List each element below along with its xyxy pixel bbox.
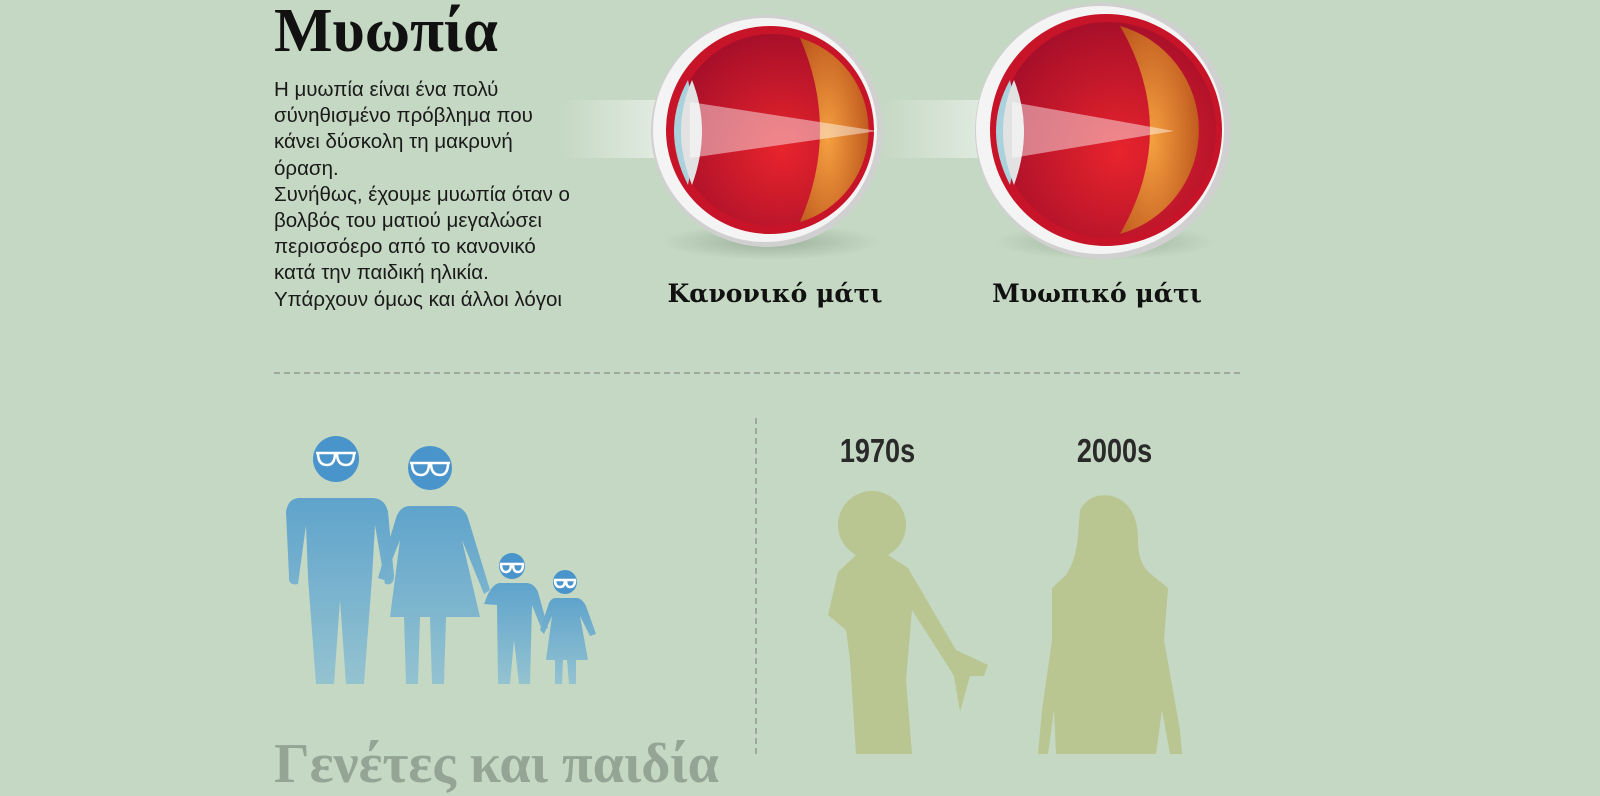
1970s label: 1970s: [840, 432, 915, 469]
bottom partial heading: Γενέτες και παιδία: [274, 733, 719, 795]
family icon: [286, 436, 596, 684]
1970s woman: [828, 491, 988, 754]
intro paragraph: Συνήθως, έχουμε μυωπία όταν ο: [274, 183, 570, 206]
myopic eye: [880, 3, 1231, 260]
2000s woman: [1038, 495, 1182, 754]
silhouettes: [828, 491, 1182, 754]
label: myopic eye: Μυωπικό μάτι: [992, 279, 1202, 308]
intro paragraph: όραση.: [274, 157, 339, 180]
intro paragraph: Η μυωπία είναι ένα πολύ: [274, 78, 498, 101]
intro paragraph: περισσόερο από το κανονικό: [274, 235, 536, 258]
intro paragraph: κατά την παιδική ηλικία.: [274, 261, 489, 284]
divider lines: [274, 372, 1244, 374]
intro paragraph: βολβός του ματιού μεγαλώσει: [274, 209, 542, 232]
intro paragraph: Υπάρχουν όμως και άλλοι λόγοι: [274, 288, 562, 311]
normal eye: [560, 15, 883, 260]
glasses: [316, 453, 576, 587]
intro paragraph: σύνηθισμένο πρόβλημα που: [274, 104, 533, 127]
intro paragraph: κάνει δύσκολη τη μακρυνή: [274, 130, 513, 153]
2000s label: 2000s: [1077, 432, 1152, 469]
label: normal eye: Κανονικό μάτι: [667, 279, 882, 308]
intro paragraph: [274, 78, 570, 311]
